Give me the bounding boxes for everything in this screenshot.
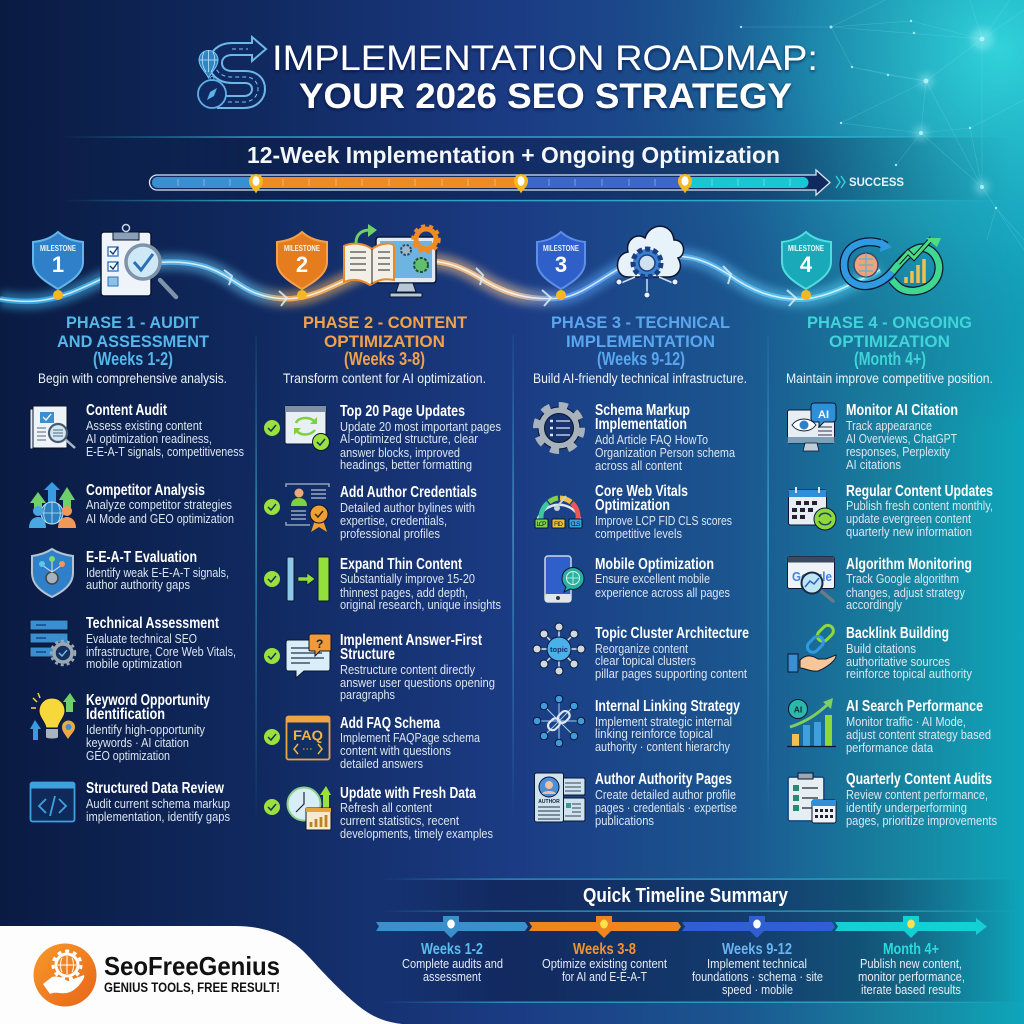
icon: google window with magnifier: Google [792, 570, 832, 584]
brand name: GENIUS TOOLS, FREE RESULT! [104, 980, 280, 995]
text: AI optimization readiness, [86, 431, 212, 446]
icon: faq window: FAQ [293, 728, 323, 743]
text: Author Authority Pages [595, 771, 732, 788]
icon: topic cluster: topic [550, 645, 568, 654]
icon: roadmap logo with pin, compass and S road [198, 37, 266, 108]
icon: topic cluster [533, 623, 585, 675]
item: keyword opportunity [30, 692, 210, 763]
icon: answer speech bubbles: ? [316, 637, 323, 651]
text: Algorithm Monitoring [846, 556, 972, 573]
text [340, 403, 501, 472]
text [86, 482, 234, 526]
panel: quick timeline summary [376, 878, 1020, 1003]
icon: ai chart [787, 698, 836, 746]
heading: phase 4: Maintain improve competitive position. [786, 370, 993, 386]
text: pages · credentials · expertise [595, 800, 737, 815]
text: authoritative sources [846, 654, 950, 669]
progress bar [150, 170, 830, 195]
item: schema markup implementation [536, 402, 736, 473]
text: update evergreen content [846, 511, 971, 526]
text: implementation, identify gaps [86, 809, 230, 824]
weeks 9-12: foundations · schema · site [692, 969, 823, 984]
item: e-e-a-t evaluation [32, 549, 229, 597]
subtitle: 12-Week Implementation + Ongoing Optimization [247, 142, 780, 168]
band: 12-week timeline [60, 136, 1010, 201]
text: AI Overviews, ChatGPT [846, 431, 957, 446]
heading: phase 3: PHASE 3 - TECHNICAL [551, 314, 730, 332]
milestone 3 shield [537, 232, 585, 300]
item: implement answer-first structure [264, 632, 495, 702]
text: across all content [595, 458, 682, 473]
heading: phase 2: OPTIMIZATION [324, 333, 445, 351]
text: clear topical clusters [595, 653, 696, 668]
weeks 9-12: Weeks 9-12 [722, 941, 792, 958]
timeline arrow [376, 916, 987, 938]
text: Backlink Building [846, 625, 949, 642]
title: YOUR 2026 SEO STRATEGY [299, 76, 792, 116]
text: GEO optimization [86, 748, 170, 763]
text: Track Google algorithm [846, 571, 959, 586]
icon: gear with list [536, 405, 582, 451]
item: backlink building [788, 623, 972, 681]
milestone 2 shield: 2 [296, 252, 308, 277]
text: Top 20 Page Updates [340, 403, 465, 420]
text [86, 549, 229, 592]
text: keywords · AI citation [86, 735, 189, 750]
text: Quarterly Content Audits [846, 771, 992, 788]
title [272, 39, 818, 116]
text: Add FAQ Schema [340, 715, 440, 732]
text: Reorganize content [595, 641, 688, 656]
text [846, 402, 958, 472]
text: Structure [340, 646, 395, 663]
text: Implement Answer-First [340, 632, 482, 649]
network constellation decoration [740, 0, 1024, 250]
text: publications [595, 813, 654, 828]
item: competitor analysis [29, 482, 234, 528]
text [595, 771, 737, 828]
text [340, 556, 501, 612]
text: headings, better formatting [340, 457, 472, 472]
text: Schema Markup [595, 402, 690, 419]
text: Mobile Optimization [595, 556, 714, 573]
heading: phase 1: Begin with comprehensive analysis. [38, 370, 227, 386]
logo emblem [34, 944, 96, 1006]
text: Update 20 most important pages [340, 419, 501, 434]
text: Add Article FAQ HowTo [595, 432, 708, 447]
text: Analyze competitor strategies [86, 497, 232, 512]
text: Restructure content directly [340, 662, 475, 677]
heading: phase 4 [786, 314, 993, 386]
heading: phase 3: IMPLEMENTATION [566, 333, 715, 351]
item: add faq schema [264, 715, 481, 771]
weeks 1-2 [402, 941, 503, 984]
text: reinforce topical authority [846, 666, 972, 681]
text: AI-optimized structure, clear [340, 431, 479, 446]
text: content with questions [340, 743, 451, 758]
milestone 4 shield [782, 232, 831, 300]
text: competitive levels [595, 526, 682, 541]
text: Technical Assessment [86, 615, 219, 632]
heading: Quick Timeline Summary [583, 884, 788, 907]
month 4+: iterate based results [861, 982, 961, 997]
weeks 9-12: speed · mobile [722, 982, 793, 997]
text: Audit current schema markup [86, 796, 230, 811]
item: ai search performance [787, 698, 991, 755]
item: regular content updates [788, 483, 993, 539]
icon: light bulb [30, 693, 76, 740]
weeks 1-2: assessment [423, 969, 481, 984]
item: quarterly content audits [788, 771, 997, 828]
text [595, 556, 730, 600]
text: Monitor traffic · AI Mode, [846, 714, 966, 729]
item: algorithm monitoring [788, 556, 972, 612]
month 4+: monitor performance, [858, 969, 965, 984]
text: authority · content hierarchy [595, 739, 730, 754]
text: current statistics, recent [340, 813, 459, 828]
icon: infinity with brain and growth chart [844, 238, 941, 291]
success label: SUCCESS [849, 175, 904, 189]
icon: people, globe, arrows [29, 482, 76, 528]
text: AI citations [846, 457, 901, 472]
panel: phase 4 [786, 314, 997, 828]
text [846, 771, 997, 828]
month 4+: Month 4+ [883, 941, 939, 958]
milestone 1 shield [33, 232, 83, 300]
panel: phase 1 [29, 314, 244, 824]
text: Improve LCP FID CLS scores [595, 513, 732, 528]
text [86, 780, 230, 824]
icon: monitor with eye and ai bubble: AI [818, 409, 829, 421]
text: quarterly new information [846, 524, 972, 539]
text [846, 698, 991, 755]
heading: phase 1: (Weeks 1-2) [93, 349, 173, 369]
text [846, 483, 993, 539]
item: top 20 page updates [264, 403, 501, 472]
icon: clock, calendar, chart [264, 786, 331, 830]
item: core web vitals [535, 483, 732, 541]
icon: author certificate [264, 484, 329, 532]
icon: calendar refresh [788, 487, 836, 530]
text [340, 484, 477, 541]
column dividers [256, 335, 769, 825]
text: Structured Data Review [86, 780, 224, 797]
icon: clipboard and calendar [788, 773, 836, 823]
text: responses, Perplexity [846, 444, 950, 459]
icon: ai chart: AI [794, 704, 802, 714]
text: paragraphs [340, 687, 395, 702]
text: Identification [86, 706, 165, 723]
heading: phase 3: Build AI-friendly technical infrastructure. [533, 370, 747, 386]
icon: code window [30, 782, 74, 822]
heading: phase 2: (Weeks 3-8) [344, 349, 425, 369]
icon: document magnifier [30, 406, 75, 449]
text: pages, prioritize improvements [846, 813, 997, 828]
icon: server and gear [30, 620, 75, 665]
text: experience across all pages [595, 585, 730, 600]
text: Add Author Credentials [340, 484, 477, 501]
weeks 1-2: Weeks 1-2 [421, 941, 483, 958]
brand name [104, 951, 280, 995]
text: Monitor AI Citation [846, 402, 958, 419]
icon: thin to thick page [264, 557, 329, 601]
text: identify underperforming [846, 800, 967, 815]
text: Internal Linking Strategy [595, 698, 740, 715]
text: Optimization [595, 497, 670, 514]
item: mobile optimization [545, 556, 730, 602]
icon: google window with magnifier [788, 556, 834, 601]
text: Identify high-opportunity [86, 722, 205, 737]
text [340, 785, 493, 841]
glowing milestone wave path [0, 256, 880, 306]
icon: hand holding chain link [788, 623, 836, 672]
text: Ensure excellent mobile [595, 571, 710, 586]
item: monitor ai citation [788, 402, 958, 472]
text: detailed answers [340, 756, 423, 771]
logo panel: SeoFreeGenius [0, 926, 402, 1024]
item: author authority pages [534, 771, 737, 828]
text [846, 556, 972, 612]
milestone 1 shield: 1 [52, 252, 64, 277]
text [340, 715, 481, 771]
text: Publish fresh content monthly, [846, 498, 993, 513]
weeks 3-8: for AI and E-E-A-T [562, 969, 647, 984]
text: Core Web Vitals [595, 483, 688, 500]
item: technical assessment [30, 615, 236, 671]
weeks 9-12: Implement technical [707, 956, 807, 971]
icon: book, monitor and gear [344, 224, 439, 297]
weeks 3-8 [542, 941, 667, 984]
weeks 3-8: Optimize existing content [542, 956, 667, 971]
text: Implement FAQPage schema [340, 730, 481, 745]
heading: phase 3: (Weeks 9-12) [597, 349, 685, 369]
text [595, 483, 732, 541]
text: Create detailed author profile [595, 787, 736, 802]
text: expertise, credentials, [340, 513, 447, 528]
panel: phase 2 [264, 314, 501, 841]
heading: phase 2: Transform content for AI optimization. [283, 370, 486, 386]
milestone 4 shield: 4 [800, 252, 813, 277]
text [340, 632, 495, 702]
text: answer user questions opening [340, 675, 495, 690]
text: Build citations [846, 641, 916, 656]
heading: phase 1: PHASE 1 - AUDIT [66, 314, 199, 332]
item: add author credentials [264, 484, 477, 541]
text: Keyword Opportunity [86, 692, 210, 709]
text: Content Audit [86, 402, 167, 419]
text: Refresh all content [340, 800, 432, 815]
item: update with fresh data [264, 785, 493, 841]
icon: speed gauge: CLS [570, 521, 581, 528]
text: Implement strategic internal [595, 714, 732, 729]
item: topic cluster architecture [533, 623, 749, 681]
text: Evaluate technical SEO [86, 631, 197, 646]
text [595, 625, 749, 681]
milestone 4 shield: MILESTONE [788, 244, 825, 253]
text: Topic Cluster Architecture [595, 625, 749, 642]
heading: phase 1: AND ASSESSMENT [57, 333, 209, 351]
title: IMPLEMENTATION ROADMAP: [272, 39, 818, 78]
milestone 2 shield: MILESTONE [284, 244, 321, 253]
text: Assess existing content [86, 418, 202, 433]
text: linking reinforce topical [595, 726, 713, 741]
text: performance data [846, 740, 934, 755]
text: E-E-A-T Evaluation [86, 549, 197, 566]
text: accordingly [846, 597, 902, 612]
text: Identify weak E-E-A-T signals, [86, 565, 229, 580]
icon: cloud with gear and nodes [616, 226, 684, 298]
heading: phase 2 [283, 314, 486, 386]
text: Implementation [595, 416, 687, 433]
text: Track appearance [846, 418, 932, 433]
icon: phone with globe [545, 556, 584, 602]
text [86, 692, 210, 763]
text: Organization Person schema [595, 445, 736, 460]
panel: phase 3 [533, 314, 749, 828]
heading: phase 2: PHASE 2 - CONTENT [303, 314, 467, 332]
milestone 1 shield: MILESTONE [40, 244, 77, 253]
text: AI Search Performance [846, 698, 983, 715]
month 4+ [858, 941, 965, 997]
text: E-E-A-T signals, competitiveness [86, 444, 244, 459]
text [595, 698, 740, 754]
milestone 2 shield [277, 232, 327, 300]
brand name: SeoFreeGenius [104, 951, 280, 981]
text: developments, timely examples [340, 826, 493, 841]
weeks 3-8: Weeks 3-8 [573, 941, 636, 958]
heading: phase 1 [38, 314, 227, 386]
icon: clipboard with magnifier [101, 224, 176, 297]
text: thinnest pages, add depth, [340, 585, 468, 600]
icon: answer speech bubbles [264, 634, 331, 678]
item: expand thin content [264, 556, 501, 612]
icon: monitor with eye and ai bubble [788, 403, 836, 451]
heading: phase 4: PHASE 4 - ONGOING [807, 314, 972, 332]
icon: author profile pages: AUTHOR [538, 799, 560, 805]
item: internal linking strategy [533, 695, 740, 754]
text: Competitor Analysis [86, 482, 205, 499]
icon: speed gauge [535, 496, 582, 528]
text: Substantially improve 15-20 [340, 571, 475, 586]
text: Review content performance, [846, 787, 988, 802]
icon: faq window [264, 716, 330, 760]
heading: phase 3 [533, 314, 747, 386]
item: content audit [30, 402, 244, 459]
text: answer blocks, improved [340, 445, 460, 460]
text: adjust content strategy based [846, 727, 991, 742]
item: structured data review [30, 780, 230, 824]
icon: chain link network [533, 695, 585, 747]
milestone 3 shield: 3 [555, 252, 567, 277]
text: Update with Fresh Data [340, 785, 476, 802]
text [595, 402, 736, 473]
text [86, 402, 244, 459]
text: Expand Thin Content [340, 556, 462, 573]
text: changes, adjust strategy [846, 585, 965, 600]
icon: author profile pages [534, 773, 585, 822]
icon: shield with network [32, 549, 73, 597]
text: original research, unique insights [340, 597, 501, 612]
text: Detailed author bylines with [340, 500, 475, 515]
text: AI Mode and GEO optimization [86, 511, 234, 526]
heading: phase 4: OPTIMIZATION [829, 333, 950, 351]
text: author authority gaps [86, 577, 190, 592]
icon: speed gauge: FID [554, 521, 563, 528]
icon: browser refresh with checks [264, 406, 330, 450]
weeks 9-12 [692, 941, 823, 997]
milestone 3 shield: MILESTONE [543, 244, 580, 253]
text [86, 615, 236, 671]
text: infrastructure, Core Web Vitals, [86, 644, 236, 659]
icon: speed gauge: LCP [536, 521, 546, 528]
text [846, 625, 972, 681]
text: pillar pages supporting content [595, 666, 747, 681]
text: professional profiles [340, 526, 440, 541]
weeks 1-2: Complete audits and [402, 956, 503, 971]
heading: phase 4: (Month 4+) [854, 349, 926, 369]
month 4+: Publish new content, [860, 956, 962, 971]
text: mobile optimization [86, 656, 182, 671]
